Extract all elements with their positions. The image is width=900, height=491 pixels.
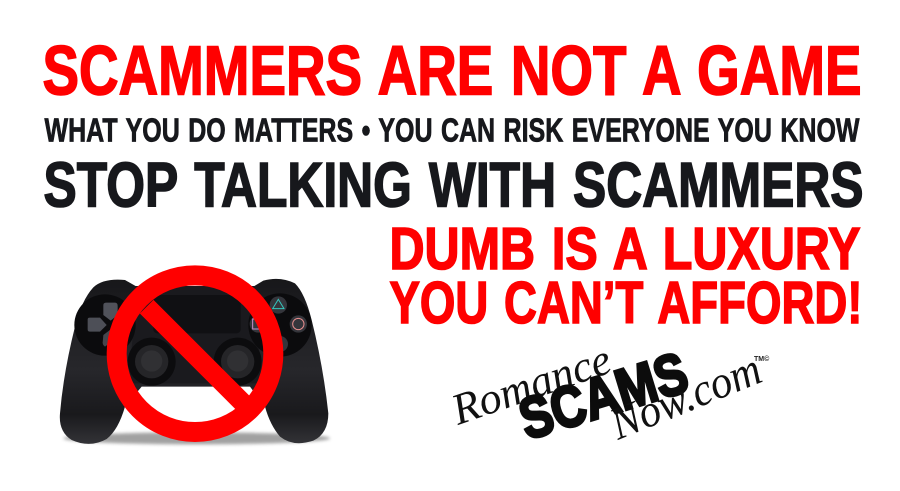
logo: RomanceScamsNow.com [444, 334, 770, 452]
callout: dumb is a luxury [390, 216, 862, 336]
logo trademark: TM© [754, 355, 770, 363]
controller body [60, 279, 328, 444]
prohibition sign [117, 275, 273, 432]
icon: crossed out game controller [60, 275, 330, 444]
logo word: Romance: Romance [444, 334, 617, 435]
logo word: Now.com: Now.com [602, 343, 768, 450]
logo word: SCAMS: SCAMS [512, 340, 695, 452]
controller shadow [63, 432, 330, 444]
